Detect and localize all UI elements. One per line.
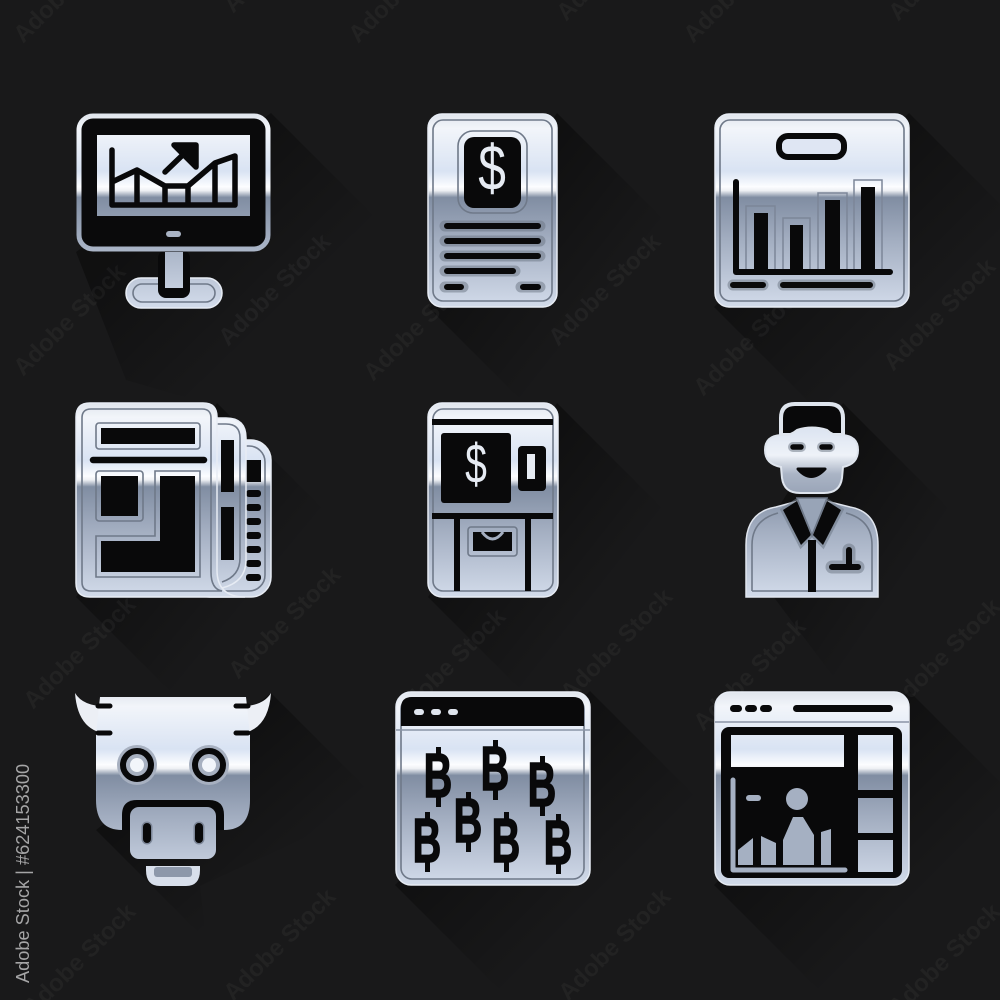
horns	[75, 693, 271, 734]
icon: newspaper	[76, 403, 271, 597]
bitcoin symbol 1: B	[424, 742, 452, 811]
banner	[731, 735, 844, 767]
headline	[96, 423, 200, 449]
watermarks: Adobe Stock	[688, 278, 812, 401]
bitcoin symbol 2: B	[481, 735, 509, 804]
icon: bar chart board	[715, 114, 909, 307]
hair	[781, 404, 843, 435]
icon: bull head	[75, 693, 271, 886]
watermarks: Adobe Stock	[213, 228, 337, 351]
dollar badge	[458, 131, 527, 213]
watermarks: Adobe Stock	[388, 603, 512, 726]
window body	[721, 727, 902, 878]
text lines	[445, 226, 540, 287]
body	[746, 501, 878, 597]
icon: financial document: $	[478, 133, 506, 205]
monitor screen	[97, 135, 250, 216]
bitcoin symbols	[413, 735, 572, 878]
photo block	[96, 471, 143, 521]
chin	[146, 866, 200, 886]
icon: businessman	[746, 404, 878, 597]
watermarks: Adobe Stock	[223, 561, 347, 684]
browser header	[401, 697, 584, 726]
bars	[736, 180, 890, 272]
icon: analytics browser window	[715, 692, 909, 885]
icon: ATM machine: $	[465, 435, 487, 496]
watermarks: Adobe Stock	[358, 263, 482, 386]
smile	[798, 469, 825, 476]
window controls	[730, 705, 893, 712]
face	[765, 428, 858, 493]
page edge bars	[246, 460, 261, 581]
handle slot	[779, 136, 844, 157]
watermarks: Adobe Stock	[8, 258, 132, 381]
pocket	[832, 550, 858, 567]
bitcoin symbol 7: B	[544, 809, 572, 878]
collar	[783, 498, 841, 545]
right eye	[189, 745, 229, 785]
ATM screen	[441, 433, 511, 503]
left eye	[117, 745, 157, 785]
line chart	[112, 145, 235, 205]
watermarks: Adobe Stock	[543, 228, 667, 351]
bitcoin symbol 4: B	[454, 787, 482, 856]
bitcoin symbol 5: B	[413, 807, 441, 876]
area chart	[733, 780, 845, 870]
icon: ATM machine	[428, 403, 558, 597]
bitcoin symbol 6: B	[492, 807, 520, 876]
snout	[122, 800, 224, 830]
icon: bitcoin browser window	[396, 692, 590, 885]
cash slot	[468, 527, 517, 556]
credit text: Adobe Stock | #624153300	[13, 764, 33, 983]
article block	[96, 471, 200, 577]
watermarks: Adobe Stock	[878, 253, 1000, 376]
watermarks: Adobe Stock	[555, 583, 679, 706]
icon: monitor with chart	[79, 116, 268, 308]
watermarks: Adobe Stock	[18, 591, 142, 714]
side panels	[858, 735, 893, 872]
bitcoin symbol 3: B	[528, 751, 556, 820]
icon: financial document	[428, 114, 557, 307]
card slot	[518, 446, 546, 491]
watermarks: Adobe Stock	[688, 613, 812, 736]
